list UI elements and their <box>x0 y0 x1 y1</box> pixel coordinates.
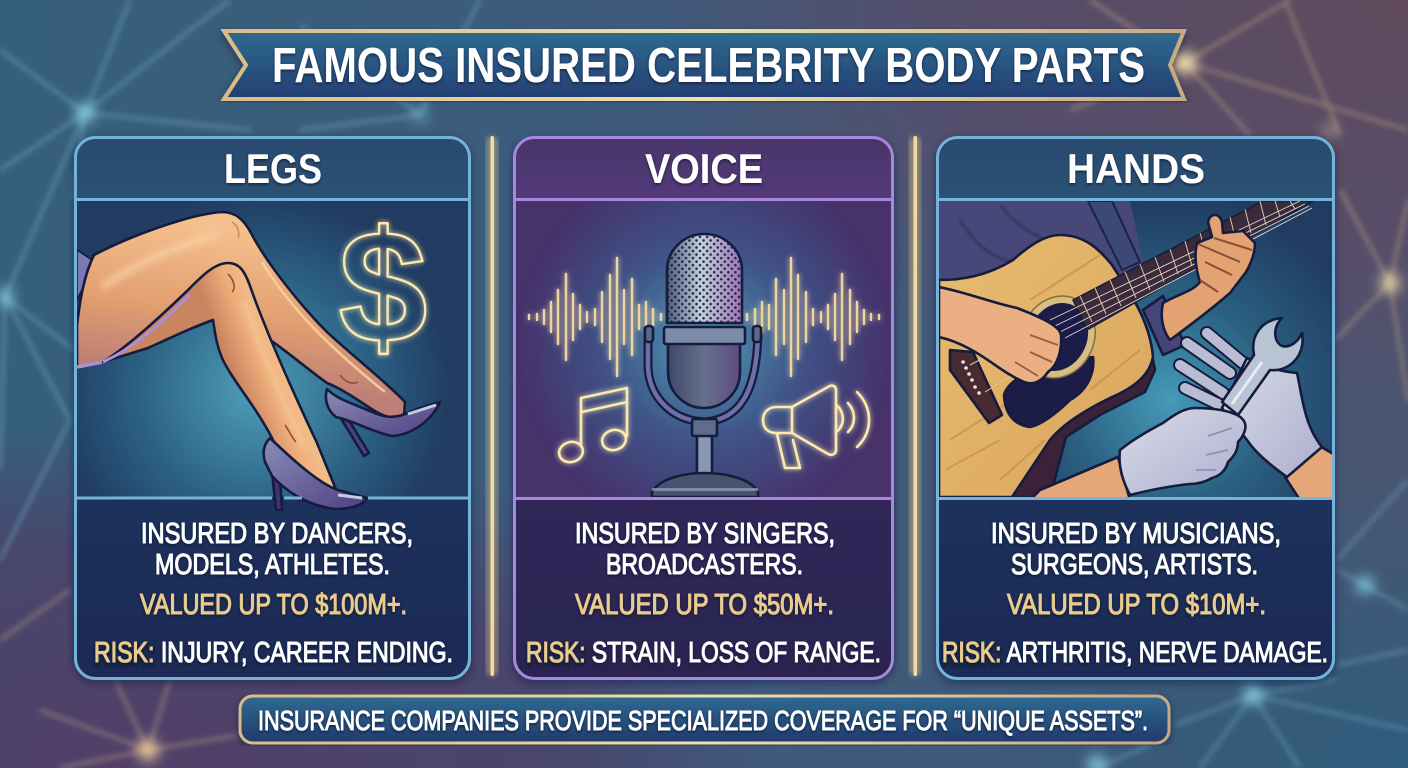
text: voice details: RISK: STRAIN, LOSS OF RANGE. <box>526 637 881 669</box>
text: hands details: VALUED UP TO $10M+. <box>1007 589 1266 621</box>
footer text: INSURANCE COMPANIES PROVIDE SPECIALIZED COVERAGE FOR “UNIQUE ASSETS”. <box>258 705 1148 736</box>
panel: voice <box>514 138 892 678</box>
fretboard <box>1073 201 1313 330</box>
front glove <box>1119 408 1245 495</box>
text: hands details: RISK: ARTHRITIS, NERVE DAMAGE. <box>942 637 1328 669</box>
icon: neon music notes <box>557 388 628 465</box>
heading: hands: HANDS <box>1067 145 1205 192</box>
bridge <box>950 345 1012 423</box>
heading: legs: LEGS <box>224 145 322 192</box>
text: legs details: INSURED BY DANCERS, <box>141 518 413 550</box>
text: voice details: VALUED UP TO $50M+. <box>575 589 834 621</box>
lower arms <box>1030 457 1130 500</box>
strumming hand <box>939 287 1061 383</box>
icon: neon megaphone <box>763 386 869 468</box>
text: hands details: SURGEONS, ARTISTS. <box>1011 549 1258 581</box>
title banner <box>224 31 1184 99</box>
illustration: guitar and gloved hands <box>939 201 1335 500</box>
text: voice details: BROADCASTERS. <box>606 549 803 581</box>
gold divider right <box>909 136 921 676</box>
text: hands details <box>942 518 1328 669</box>
wrench <box>1222 318 1303 415</box>
text: voice details <box>526 518 881 669</box>
text: legs details: MODELS, ATHLETES. <box>155 549 390 581</box>
guitar body <box>1014 358 1156 497</box>
shirt <box>939 201 1143 279</box>
heading: voice: VOICE <box>645 145 763 192</box>
text: legs details <box>94 518 453 669</box>
text: voice details: INSURED BY SINGERS, <box>575 518 835 550</box>
fretting hand <box>1143 215 1255 355</box>
text: legs details: RISK: INJURY, CAREER ENDING. <box>94 637 453 669</box>
illustration: crossed legs <box>77 212 440 510</box>
panel: hands <box>938 138 1335 678</box>
gold divider left <box>486 136 498 676</box>
text: hands details: INSURED BY MUSICIANS, <box>991 518 1281 550</box>
title text: FAMOUS INSURED CELEBRITY BODY PARTS <box>272 39 1145 93</box>
sound waves <box>529 258 879 376</box>
icon: neon dollar sign: $ <box>339 197 427 376</box>
text: legs details: VALUED UP TO $100M+. <box>140 589 407 621</box>
footer note <box>240 696 1169 743</box>
icon: high heel lower <box>264 438 367 510</box>
panel: legs <box>76 138 470 678</box>
icon: high heel upper <box>326 389 440 456</box>
pickguard and soundhole <box>1004 357 1093 427</box>
back glove <box>1180 333 1322 477</box>
icon: microphone <box>645 234 761 497</box>
